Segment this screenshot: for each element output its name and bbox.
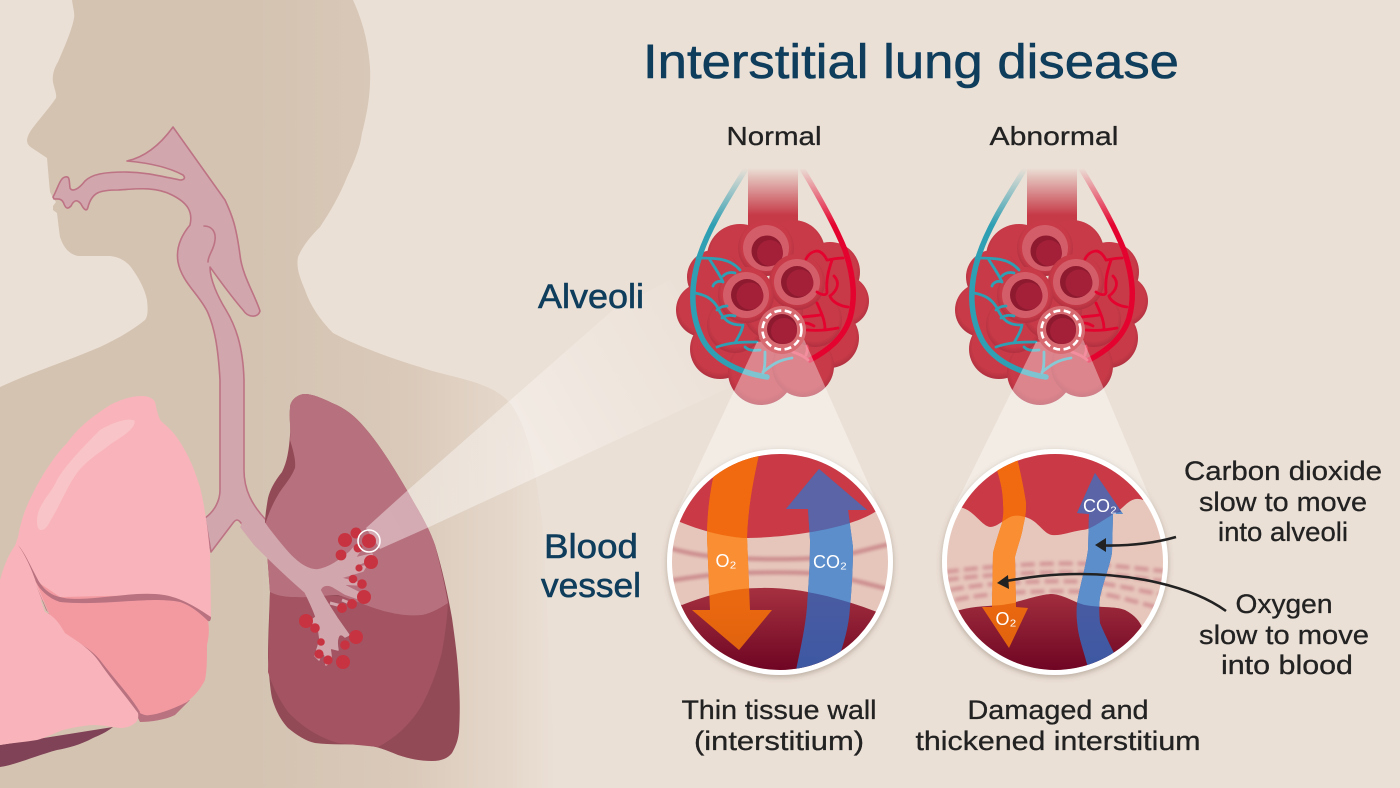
upper red blood region — [962, 454, 1144, 536]
carbon dioxide arrow — [786, 469, 867, 669]
lower lobe — [268, 592, 448, 747]
left lung (outer view) — [0, 396, 211, 767]
light beam from small alveolus to cluster — [366, 280, 735, 549]
title: Interstitial lung disease — [643, 36, 1179, 89]
lower lobe — [0, 543, 138, 745]
O2 label: O₂ — [716, 551, 737, 571]
label: Blood vessel: Blood — [544, 528, 638, 566]
oxygen arrow — [982, 460, 1028, 648]
right lung (cross section) — [265, 394, 460, 761]
label: Blood vessel — [541, 528, 641, 605]
highlight — [37, 420, 135, 530]
upper red blood region — [680, 454, 876, 538]
callout text: oxygen — [1199, 589, 1369, 680]
callout text: carbon dioxide: into alveoli — [1218, 517, 1348, 547]
CO2 label: CO₂ — [1083, 496, 1117, 516]
caption: thin tissue wall: Thin tissue wall — [682, 695, 876, 725]
lower lobe dark fissure — [36, 585, 140, 718]
normal column cone from alveolus to lens — [678, 337, 880, 510]
rear lower edge — [135, 700, 190, 722]
carbon dioxide arrow — [1076, 473, 1123, 665]
arrow: oxygen callout — [997, 574, 1226, 611]
airway: nasal passage, throat and trachea — [53, 127, 280, 558]
small alveoli clusters — [299, 528, 378, 669]
O2 label: O₂ — [996, 609, 1017, 629]
callout text: carbon dioxide: slow to move — [1199, 487, 1367, 517]
upper lobe — [265, 394, 448, 615]
lower dark blood region — [680, 588, 876, 670]
lung outline dark base — [265, 394, 460, 761]
callout text: oxygen: Oxygen — [1236, 589, 1332, 619]
scarred tissue lines — [945, 563, 1175, 608]
esophagus fold line — [204, 226, 215, 262]
caption: damaged interstitium — [916, 695, 1200, 756]
fissure between upper and middle lobe — [18, 545, 211, 621]
abnormal blood vessel lens — [939, 448, 1171, 680]
CO2 label: CO₂ — [813, 552, 847, 572]
callout text: oxygen: into blood — [1221, 650, 1353, 680]
arrow: carbon dioxide callout — [1095, 537, 1176, 552]
normal alveoli cluster — [676, 168, 869, 405]
abnormal column cone from alveolus to lens — [953, 337, 1155, 510]
upper lobe — [10, 396, 211, 620]
lower dark blood region — [958, 594, 1142, 670]
label: Blood vessel: vessel — [541, 567, 641, 605]
body silhouette — [0, 0, 556, 788]
callout text: carbon dioxide — [1184, 456, 1382, 547]
middle lobe — [35, 580, 209, 715]
heading: Abnormal: Abnormal — [990, 121, 1118, 151]
normal blood vessel lens — [664, 448, 896, 680]
bronchial tree — [241, 502, 373, 665]
tissue wall lines — [660, 542, 900, 592]
oxygen arrow — [692, 456, 772, 650]
abnormal alveoli cluster — [955, 168, 1148, 405]
white marker ring on alveolus — [358, 530, 380, 552]
caption: thin tissue wall — [682, 695, 876, 756]
lower dark underside — [0, 727, 113, 767]
callout text: oxygen: slow to move — [1199, 620, 1369, 650]
label: Alveoli: Alveoli — [538, 278, 644, 316]
caption: damaged interstitium: Damaged and — [968, 695, 1148, 725]
abnormal highlighted alveolus — [1037, 306, 1085, 354]
callout text: carbon dioxide: Carbon dioxide — [1184, 456, 1382, 486]
normal highlighted alveolus — [758, 306, 806, 354]
caption: thin tissue wall: (interstitium) — [694, 726, 864, 756]
heading: Normal: Normal — [726, 121, 822, 151]
caption: damaged interstitium: thickened interstitium — [916, 726, 1200, 756]
